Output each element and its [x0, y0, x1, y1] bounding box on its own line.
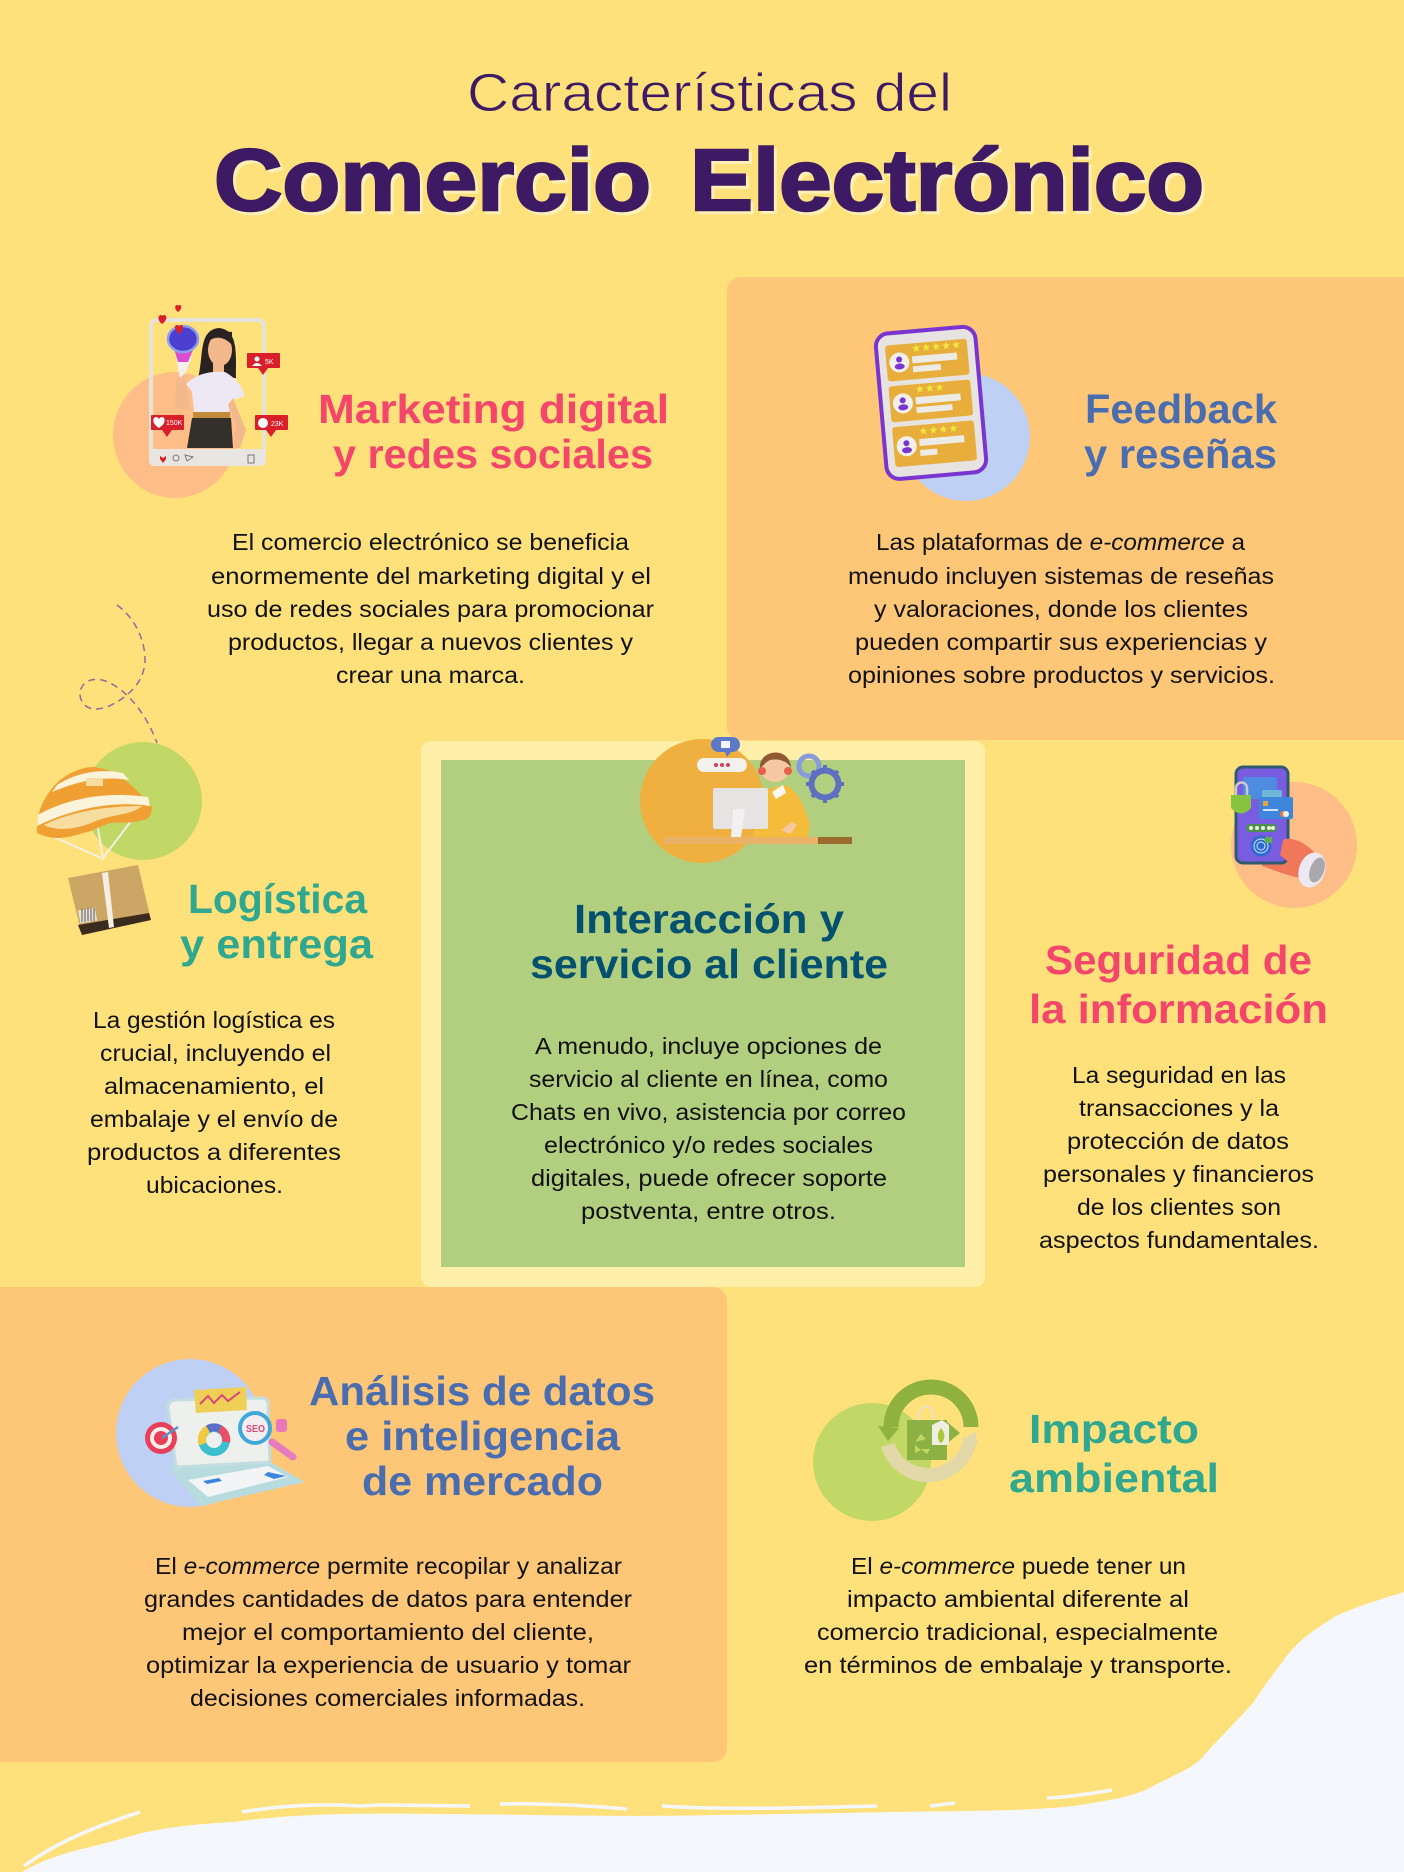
text: environmental impact: comercio tradicional, especialmente: [817, 1619, 1218, 1645]
heading: data analysis: Análisis de datos: [309, 1368, 655, 1414]
heading: customer service: [530, 896, 888, 987]
text: logistics: [87, 1007, 341, 1198]
heading: environmental impact: [1009, 1406, 1219, 1501]
title line 2: Electrónico: [690, 132, 1204, 229]
text: security: [1039, 1062, 1319, 1253]
text: marketing: [207, 529, 654, 688]
text: feedback: pueden compartir sus experiencias y: [855, 629, 1268, 655]
icon: reviews phone: [875, 326, 1030, 501]
text: data analysis: mejor el comportamiento del cliente,: [182, 1619, 594, 1645]
heading: environmental impact: ambiental: [1009, 1455, 1219, 1501]
heading: data analysis: [309, 1368, 655, 1504]
text: feedback: Las plataformas de e-commerce a: [876, 529, 1245, 555]
heading: feedback: [1084, 386, 1277, 477]
text: feedback: opiniones sobre productos y servicios.: [848, 662, 1275, 688]
heading: customer service: servicio al cliente: [530, 941, 888, 987]
text: customer service: electrónico y/o redes sociales: [544, 1132, 873, 1158]
text: data analysis: El e-commerce permite recopilar y analizar: [155, 1553, 622, 1579]
text: data analysis: [144, 1553, 632, 1711]
heading: security: la información: [1029, 986, 1328, 1032]
text: customer service: [511, 1033, 906, 1224]
text: marketing: crear una marca.: [336, 662, 525, 688]
text: feedback: y valoraciones, donde los clientes: [874, 596, 1248, 622]
icon: customer support agent: [640, 737, 852, 863]
heading: security: Seguridad de: [1045, 937, 1312, 983]
text: logistics: productos a diferentes: [87, 1139, 341, 1165]
heading: marketing: Marketing digital: [318, 386, 669, 432]
panel: feedback background: [727, 277, 1404, 740]
text: environmental impact: impacto ambiental diferente al: [847, 1586, 1189, 1612]
icon: data analysis laptop: [116, 1359, 305, 1507]
heading: data analysis: de mercado: [362, 1458, 603, 1504]
panel: data analysis background: [0, 1287, 727, 1762]
heading: logistics: y entrega: [180, 921, 374, 967]
text: logistics: almacenamiento, el: [104, 1073, 324, 1099]
text: data analysis: decisiones comerciales informadas.: [190, 1685, 585, 1711]
panel: customer service background: [421, 741, 985, 1287]
text: security: personales y financieros: [1043, 1161, 1314, 1187]
title line 1: Características del: [467, 63, 952, 123]
text: customer service: A menudo, incluye opciones de: [535, 1033, 882, 1059]
text: logistics: ubicaciones.: [146, 1172, 283, 1198]
icon: marketing influencer: [113, 305, 288, 498]
title line 2: [214, 132, 1204, 229]
text: logistics: La gestión logística es: [93, 1007, 335, 1033]
heading: environmental impact: Impacto: [1029, 1406, 1199, 1452]
heading: customer service: Interacción y: [574, 896, 844, 942]
text: feedback: [848, 529, 1275, 688]
heading: feedback: Feedback: [1085, 386, 1277, 432]
icon: secure phone: [1231, 767, 1357, 908]
icon: marketing influencer: 23K: [271, 421, 284, 428]
heading: security: [1029, 937, 1328, 1032]
text: data analysis: grandes cantidades de datos para entender: [144, 1586, 632, 1612]
heading: feedback: y reseñas: [1084, 431, 1277, 477]
text: security: protección de datos: [1067, 1128, 1289, 1154]
heading: logistics: [180, 876, 374, 967]
heading: data analysis: e inteligencia: [345, 1413, 621, 1459]
text: customer service: postventa, entre otros.: [581, 1198, 836, 1224]
text: marketing: uso de redes sociales para promocionar: [207, 596, 654, 622]
white brush wave: [22, 1592, 1404, 1872]
title: [214, 63, 1204, 229]
text: logistics: crucial, incluyendo el: [100, 1040, 331, 1066]
dashed flight path: [80, 605, 157, 743]
text: environmental impact: El e-commerce puede tener un: [851, 1553, 1186, 1579]
text: marketing: productos, llegar a nuevos clientes y: [228, 629, 634, 655]
text: customer service: digitales, puede ofrecer soporte: [531, 1165, 887, 1191]
heading: logistics: Logística: [188, 876, 368, 922]
heading: marketing: [318, 386, 669, 477]
text: marketing: enormemente del marketing digital y el: [211, 563, 651, 589]
text: data analysis: optimizar la experiencia de usuario y tomar: [146, 1652, 631, 1678]
icon: data analysis laptop: SEO: [246, 1424, 265, 1435]
text: environmental impact: en términos de embalaje y transporte.: [804, 1652, 1232, 1678]
text: customer service: Chats en vivo, asistencia por correo: [511, 1099, 906, 1125]
text: customer service: servicio al cliente en línea, como: [529, 1066, 888, 1092]
text: logistics: embalaje y el envío de: [90, 1106, 338, 1132]
text: security: aspectos fundamentales.: [1039, 1227, 1319, 1253]
text: environmental impact: [804, 1553, 1232, 1678]
icon: recycling bag: [813, 1387, 978, 1521]
text: marketing: El comercio electrónico se beneficia: [232, 529, 629, 555]
text: security: La seguridad en las: [1072, 1062, 1286, 1088]
heading: marketing: y redes sociales: [333, 431, 653, 477]
text: security: de los clientes son: [1077, 1194, 1281, 1220]
icon: marketing influencer: 150K: [166, 420, 183, 427]
icon: marketing influencer: 5K: [265, 359, 274, 366]
text: security: transacciones y la: [1079, 1095, 1279, 1121]
text: feedback: menudo incluyen sistemas de reseñas: [848, 563, 1274, 589]
title line 2: Comercio: [214, 132, 651, 229]
icon: parachute delivery: [37, 742, 202, 935]
